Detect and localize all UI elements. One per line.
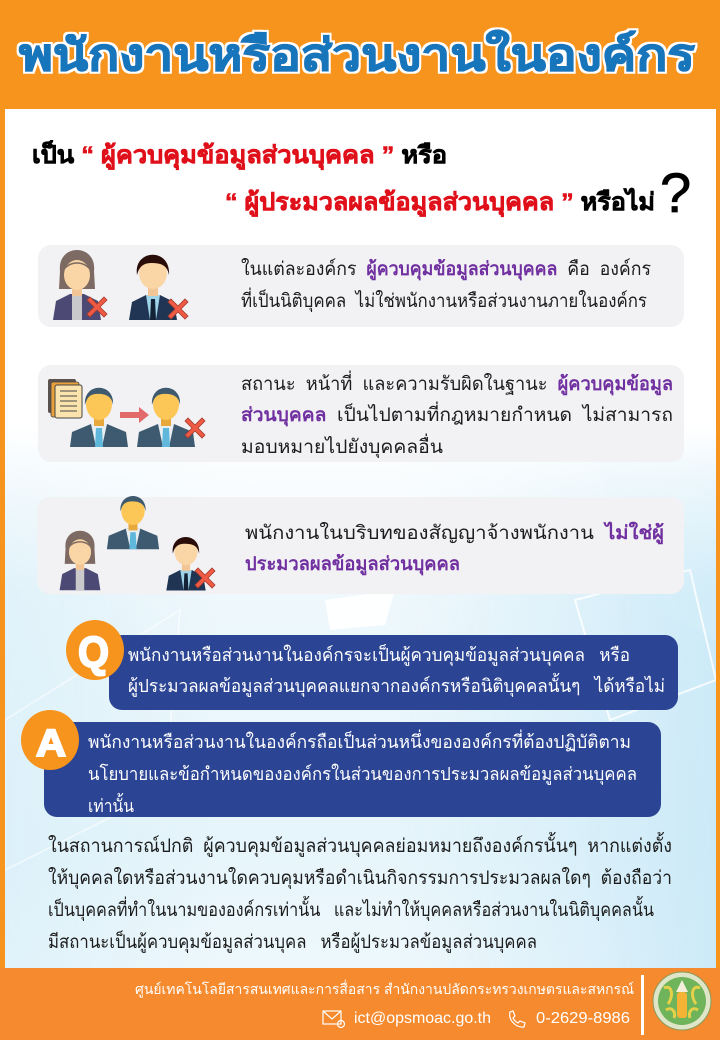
explanation paragraph: มีสถานะเป็นผู้ควบคุมข้อมูลส่วนบุคล หรือผู้ประมวลข้อมูลส่วนบุคคล <box>48 929 537 954</box>
Q badge: Q <box>78 628 109 677</box>
footer <box>0 968 720 1040</box>
card 3 text: ประมวลผลข้อมูลส่วนบุคคล <box>245 553 460 576</box>
card 1 text: ในแต่ละองค์กร ผู้ควบคุมข้อมูลส่วนบุคคล คือ องค์กร <box>241 258 651 281</box>
panel: card 1 <box>38 245 684 327</box>
card 2 text: สถานะ หน้าที่ และความรับผิดในฐานะ ผู้ควบคุมข้อมูล <box>241 370 673 396</box>
arrow <box>120 407 149 423</box>
question box <box>66 620 678 710</box>
question text: พนักงานหรือส่วนงานในองค์กรจะเป็นผู้ควบคุมข้อมูลส่วนบุคคล หรือ <box>128 643 630 666</box>
icon: man with cross <box>166 537 215 591</box>
icon: email <box>323 1011 344 1028</box>
A badge: A <box>36 723 66 765</box>
explanation paragraph <box>48 832 672 954</box>
card 3 text: พนักงานในบริบทของสัญญาจ้างพนักงาน ไม่ใช่ผู้ <box>245 521 664 545</box>
A badge <box>21 710 79 770</box>
icon: person giving <box>70 388 128 447</box>
card 1 text <box>241 258 651 313</box>
icon: man at top <box>107 496 159 549</box>
question text <box>128 643 665 697</box>
card 2 text <box>241 370 673 459</box>
icon: documents <box>48 379 82 418</box>
answer text <box>88 729 637 816</box>
question mark: ? <box>660 161 691 224</box>
question text: ผู้ประมวลผลข้อมูลส่วนบุคคลแยกจากองค์กรหรือนิติบุคคลนั้นๆ ได้หรือไม่ <box>128 673 665 697</box>
divider <box>641 975 644 1035</box>
panel: card 3 <box>37 496 684 594</box>
answer box <box>21 710 661 817</box>
answer text: เท่านั้น <box>88 793 134 816</box>
footer organisation name: ศูนย์เทคโนโลยีสารสนเทศและการสื่อสาร สำนักงานปลัดกระทรวงเกษตรและสหกรณ์ <box>135 980 634 998</box>
explanation paragraph: ในสถานการณ์ปกติ ผู้ควบคุมข้อมูลส่วนบุคคลย่อมหมายถึงองค์กรนั้นๆ หากแต่งตั้ง <box>48 832 672 858</box>
panel: card 2 <box>38 365 684 462</box>
email address: ict@opsmoac.go.th <box>354 1010 491 1027</box>
icon: woman <box>60 531 100 590</box>
card 2 text: มอบหมายไปยังบุคคลอื่น <box>241 433 443 459</box>
icon: phone <box>510 1011 525 1027</box>
card 2 text: ส่วนบุคคล เป็นไปตามที่กฎหมายกำหนด ไม่สามารถ <box>241 401 673 427</box>
icon: man with cross <box>129 255 188 320</box>
answer text: พนักงานหรือส่วนงานในองค์กรถือเป็นส่วนหนึ่งขององค์กรที่ต้องปฏิบัติตาม <box>88 729 631 752</box>
phone number: 0-2629-8986 <box>536 1010 630 1027</box>
card 1 text: ที่เป็นนิติบุคคล ไม่ใช่พนักงานหรือส่วนงานภายในองค์กร <box>241 287 647 313</box>
logo <box>653 972 711 1030</box>
answer text: นโยบายและข้อกำหนดขององค์กรในส่วนของการประมวลผลข้อมูลส่วนบุคคล <box>88 763 637 785</box>
Q badge <box>66 620 124 680</box>
title: พนักงานหรือส่วนงานในองค์กร <box>19 29 695 80</box>
icon: woman with cross <box>53 250 107 320</box>
subheading line 2: “ ผู้ประมวลผลข้อมูลส่วนบุคคล ” หรือไม่ <box>225 187 655 218</box>
icon: person with cross <box>137 388 205 447</box>
subheading line 1: เป็น “ ผู้ควบคุมข้อมูลส่วนบุคคล ” หรือ <box>32 140 447 171</box>
card 3 text <box>245 521 664 576</box>
explanation paragraph: ให้บุคคลใดหรือส่วนงานใดควบคุมหรือดำเนินกิจกรรมการประมวลผลใดๆ ต้องถือว่า <box>48 867 672 890</box>
